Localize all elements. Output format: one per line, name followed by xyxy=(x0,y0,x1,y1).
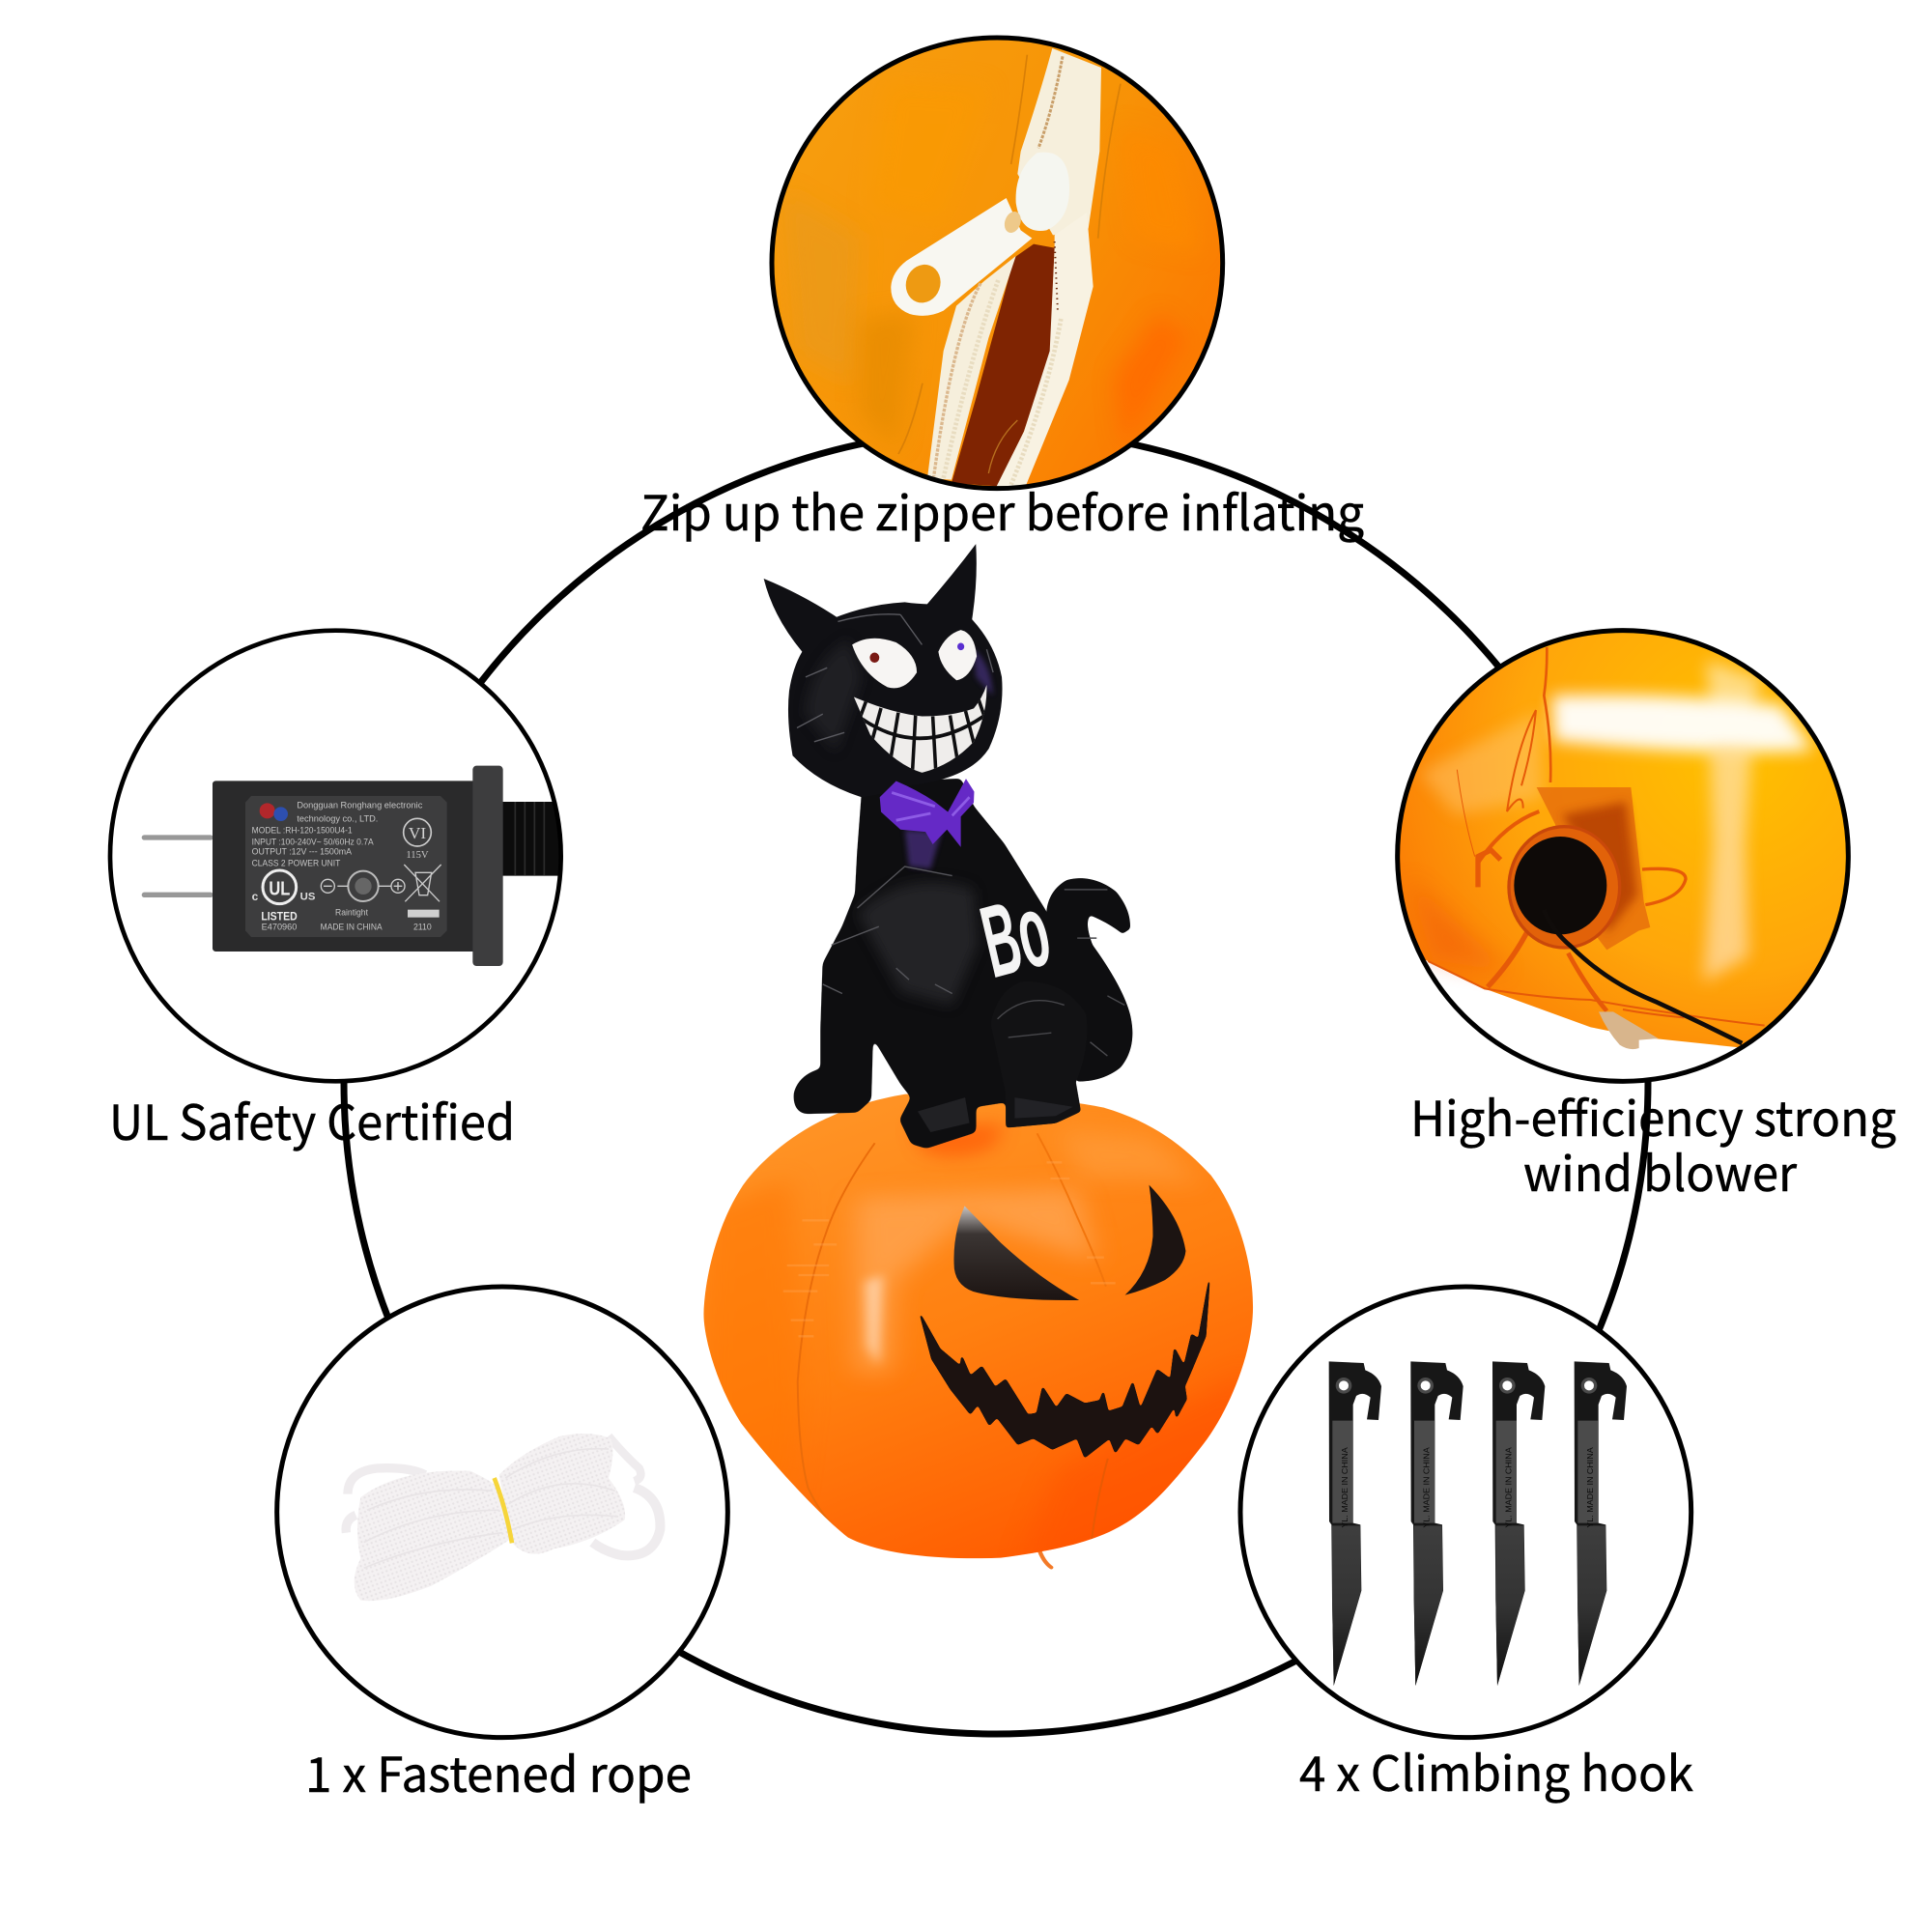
rope bundle right xyxy=(499,1434,660,1555)
cat eyes xyxy=(852,639,917,688)
main illustration: black cat xyxy=(764,544,1132,1149)
plug prongs xyxy=(142,835,213,897)
large connecting ring xyxy=(344,430,1648,1734)
adapter body xyxy=(213,781,476,952)
pumpkin jagged mouth xyxy=(921,1282,1209,1457)
rope bundle left xyxy=(346,1468,510,1601)
adapter label: INPUT :100-240V~ 50/60Hz 0.7A xyxy=(252,837,374,846)
adapter collar xyxy=(472,766,503,966)
label: blower xyxy=(1410,1081,1896,1206)
cat haunch xyxy=(991,981,1087,1127)
adapter label: Raintight xyxy=(335,908,368,918)
adapter label: MADE IN CHINA xyxy=(321,922,383,931)
cat front foot highlight xyxy=(918,1097,1073,1132)
zipper tape upper xyxy=(1017,48,1101,235)
adapter label: 2110 xyxy=(413,922,432,931)
hook 4 xyxy=(1575,1361,1627,1686)
adapter label: UL xyxy=(269,878,290,900)
label: rope: 1 x Fastened rope xyxy=(305,1737,692,1806)
panel: zipper detail photo xyxy=(772,38,1223,489)
zipper opening xyxy=(952,244,1055,486)
blower black opening xyxy=(1514,837,1606,934)
adapter label: US xyxy=(300,891,316,902)
zipper pull tab xyxy=(891,198,1032,316)
cat grin teeth xyxy=(854,685,987,773)
panel: climbing hooks xyxy=(1240,1287,1691,1738)
cat tail xyxy=(1046,878,1132,1081)
pumpkin left eye xyxy=(953,1206,1079,1300)
zipper tape lower left xyxy=(927,256,1016,480)
adapter label: OUTPUT :12V --- 1500mA xyxy=(252,847,352,857)
zipper tape lower right xyxy=(997,213,1094,486)
cat head with ears xyxy=(764,544,1003,797)
panel: UL certified power adapter xyxy=(110,631,561,1081)
adapter label: c xyxy=(252,890,259,903)
panel: fastened rope xyxy=(277,1287,727,1738)
panel: blower detail photo xyxy=(1381,618,1864,1081)
pumpkin right eye xyxy=(1125,1185,1185,1295)
hook 3 xyxy=(1492,1361,1545,1686)
adapter label xyxy=(245,796,447,937)
fabric highlights xyxy=(1407,660,1813,982)
Boo lettering: Boo xyxy=(972,864,1089,1000)
adapter label: LISTED xyxy=(261,910,298,923)
label: hooks: 4 x Climbing hook xyxy=(1299,1736,1693,1805)
hook 2 xyxy=(1410,1361,1463,1686)
zipper pull tag xyxy=(1599,1011,1659,1049)
adapter label: CLASS 2 POWER UNIT xyxy=(252,859,341,868)
power cord xyxy=(1555,934,1743,1045)
label: UL certified: UL Safety Certified xyxy=(109,1085,515,1154)
zipper slider xyxy=(1016,153,1069,231)
cat body xyxy=(794,779,1081,1149)
adapter label: Dongguan Ronghang electronic xyxy=(297,801,423,810)
adapter cable strain relief xyxy=(502,802,560,876)
orange inflated fabric xyxy=(1400,633,1846,1047)
yellow rubber band xyxy=(495,1478,512,1543)
label: blower: wind blower xyxy=(1523,1136,1798,1206)
fabric folds and shading xyxy=(782,55,1201,454)
blower patch xyxy=(1537,787,1650,950)
label: zipper: Zip up the zipper before inflating xyxy=(640,475,1364,545)
seams and ties xyxy=(1428,647,1765,1026)
label: blower: High-efficiency strong xyxy=(1410,1081,1896,1151)
adapter label: 115V xyxy=(406,850,429,861)
adapter label: E470960 xyxy=(262,923,297,932)
adapter label: VI xyxy=(409,824,426,842)
adapter label: MODEL :RH-120-1500U4-1 xyxy=(252,826,353,836)
main illustration: pumpkin xyxy=(699,1094,1253,1568)
cat purple bow tie xyxy=(880,779,974,847)
hook 1 xyxy=(1329,1361,1381,1686)
adapter label: technology co., LTD. xyxy=(297,813,378,823)
